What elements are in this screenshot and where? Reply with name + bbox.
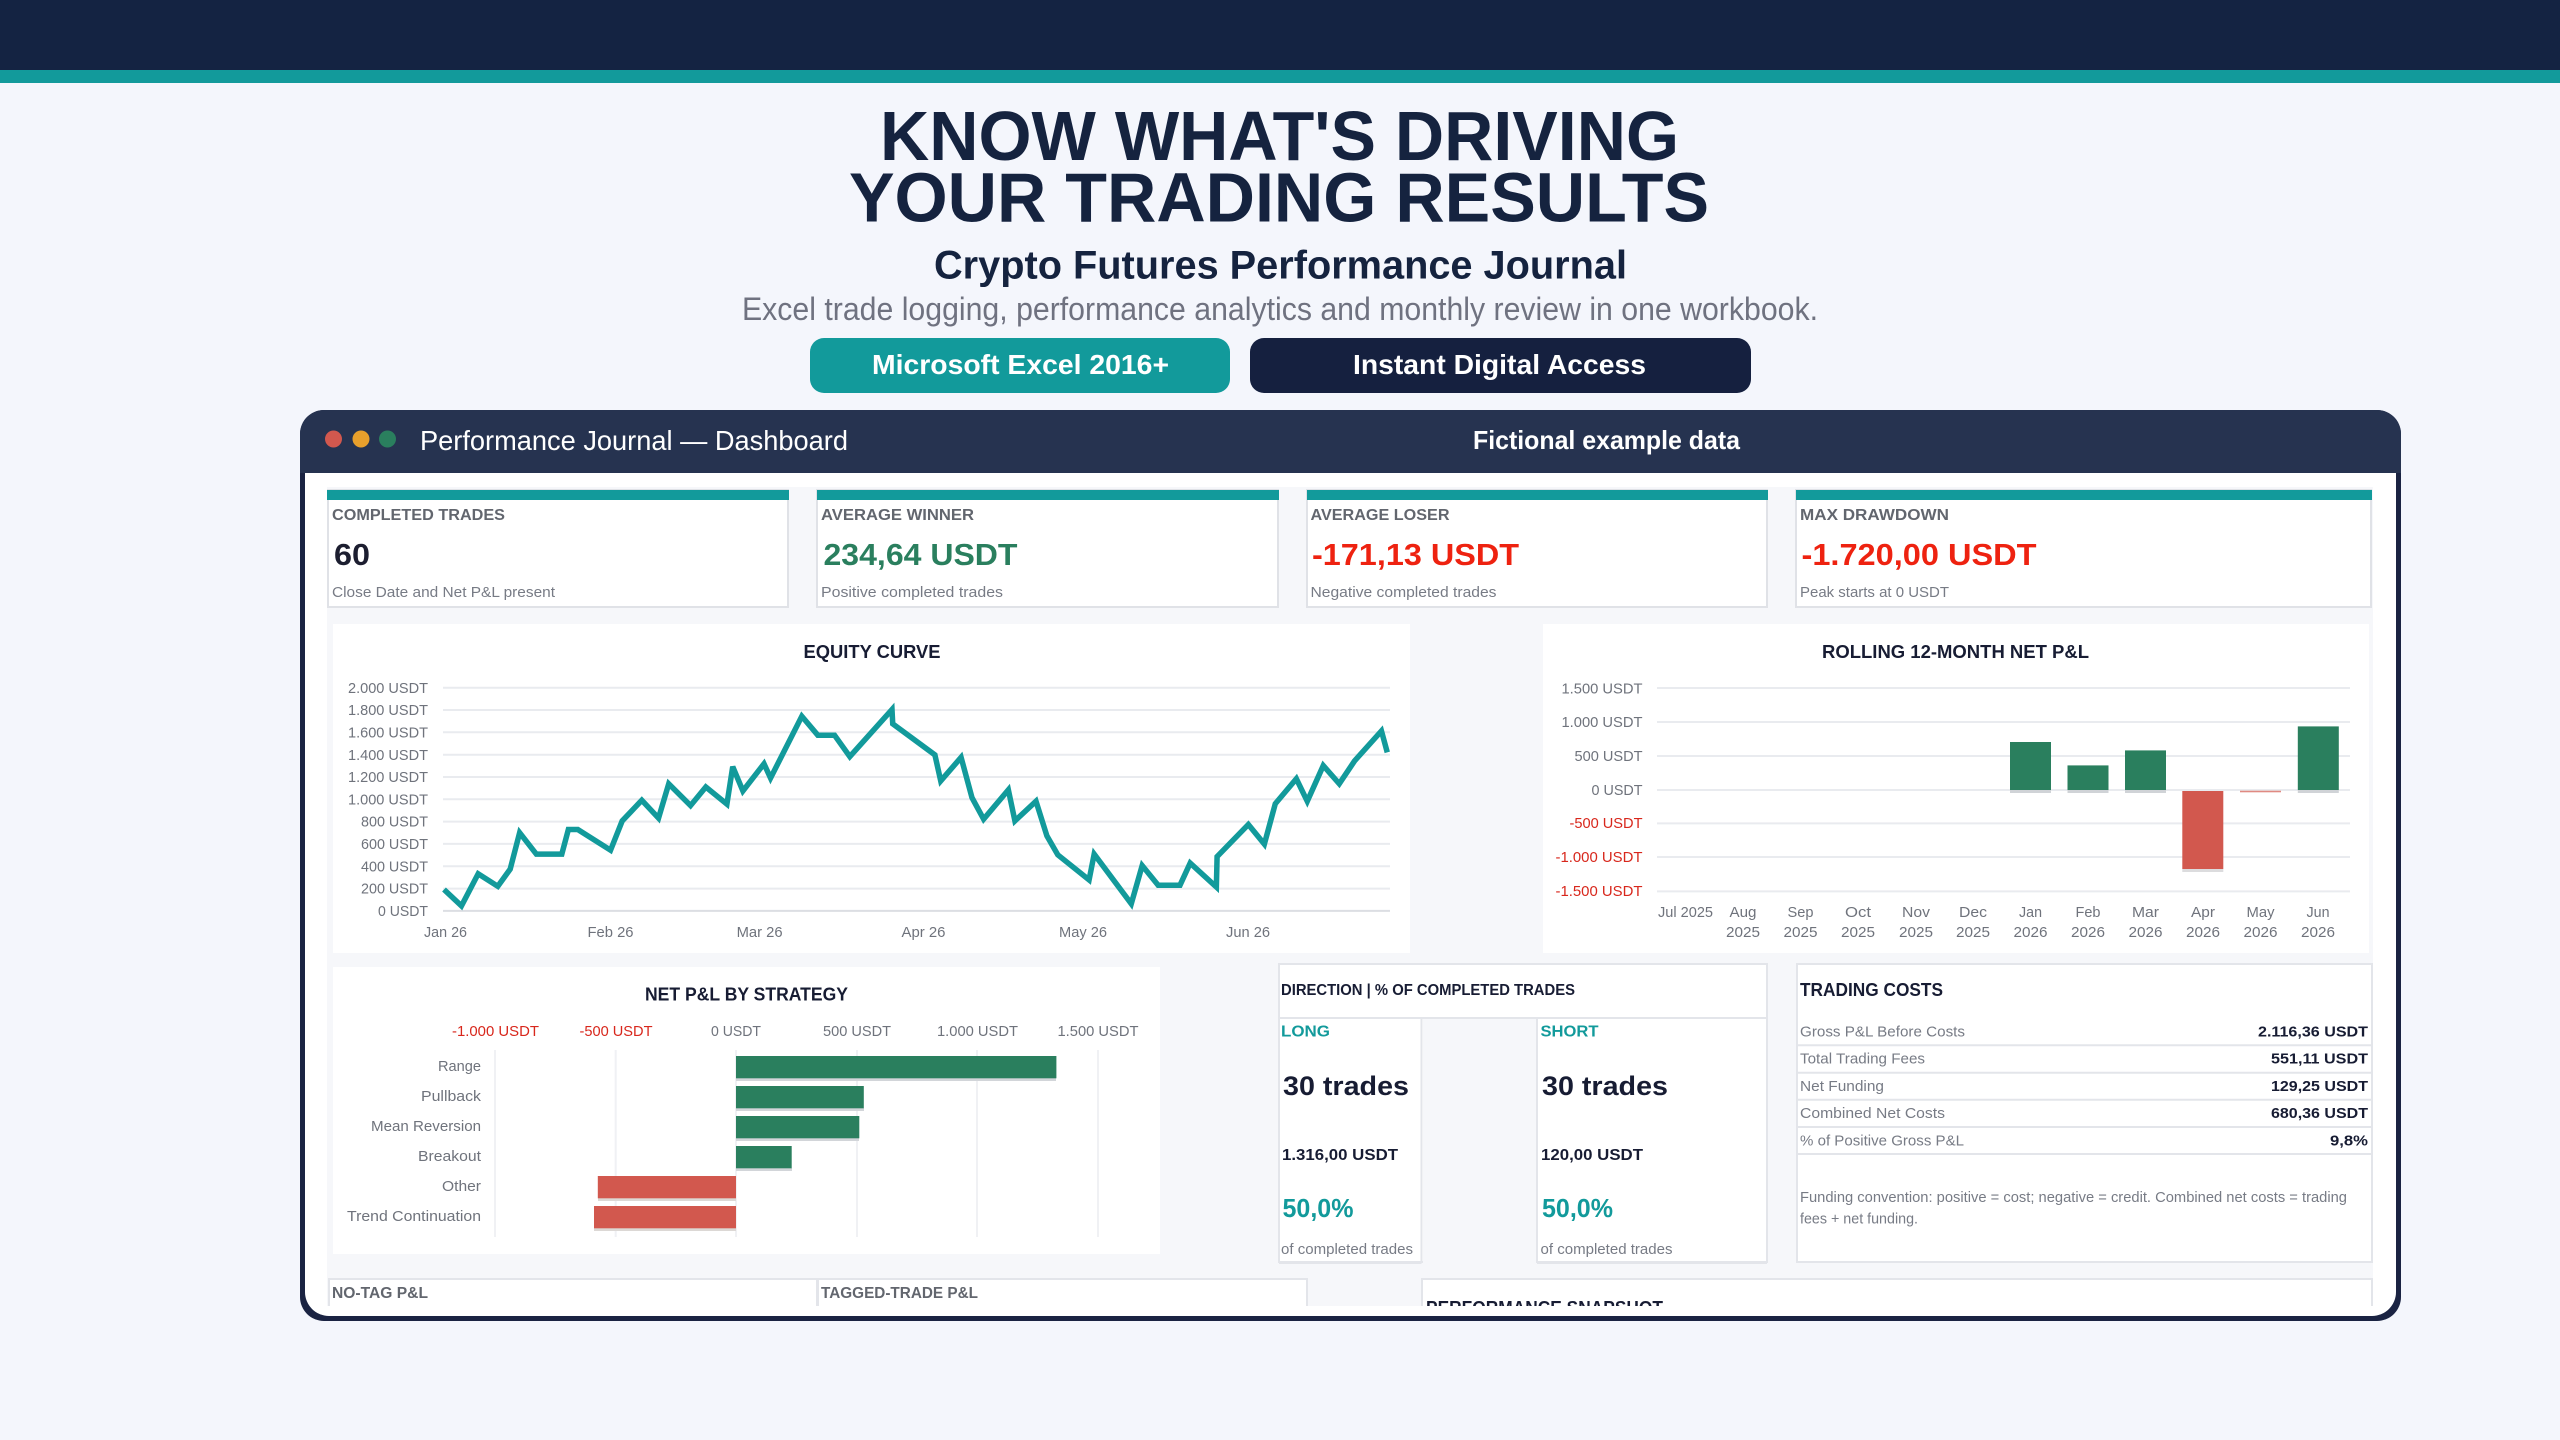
cost rows: [1800, 1024, 2368, 1150]
rolling y axis labels: -1.500 USDT: [1556, 883, 1642, 900]
performance snapshot card: [1421, 1278, 2373, 1306]
window controls: [325, 430, 396, 448]
KPI card: completed trades: COMPLETED TRADES: [332, 507, 505, 524]
rolling y axis labels: 1.500 USDT: [1562, 680, 1642, 697]
rolling x axis labels: 2025: [1726, 924, 1760, 941]
panel: direction split: [1279, 964, 1767, 1264]
cost rows: Total Trading Fees: [1800, 1050, 1925, 1068]
cost rows: 2.116,36 USDT: [2258, 1024, 2368, 1040]
strategy axis labels: 1.000 USDT: [937, 1023, 1018, 1040]
rolling x axis labels: 2025: [1784, 924, 1818, 941]
panel: rolling 12-month net P&L chart: [1543, 624, 2369, 953]
panel: equity curve chart: [333, 624, 1410, 953]
equity x axis labels: Apr 26: [902, 924, 946, 941]
subtitle: Crypto Futures Performance Journal: [934, 244, 1627, 288]
equity y axis labels: 1.800 USDT: [348, 702, 428, 719]
funding note: fees + net funding.: [1800, 1210, 1918, 1228]
rolling y axis labels: 500 USDT: [1574, 748, 1642, 765]
cost rows: 129,25 USDT: [2271, 1078, 2368, 1095]
equity y axis labels: 1.200 USDT: [348, 769, 428, 786]
short column: SHORT: [1540, 1024, 1599, 1040]
funding note: Funding convention: positive = cost; negative = credit. Combined net costs = trading: [1800, 1189, 2347, 1206]
equity y axis labels: 1.400 USDT: [348, 747, 428, 764]
rolling x axis labels: Feb: [2076, 904, 2100, 921]
rolling x axis labels: Nov: [1902, 904, 1931, 921]
equity x axis labels: [424, 924, 1270, 941]
title: KNOW WHAT'S DRIVING: [880, 97, 1679, 175]
short column: 50,0%: [1542, 1193, 1613, 1223]
strategy bars: [594, 1056, 1056, 1231]
rolling x axis labels: Aug: [1730, 904, 1756, 921]
cost rows: Net Funding: [1800, 1078, 1884, 1095]
strategy category labels: [347, 1058, 482, 1225]
panel: trading costs: [1797, 964, 2372, 1262]
KPI card: average winner: [817, 490, 1279, 607]
short column: 120,00 USDT: [1541, 1147, 1643, 1164]
tagged-trade P&L card: [818, 1278, 1308, 1306]
equity y axis labels: 2.000 USDT: [348, 680, 428, 697]
long column: of completed trades: [1281, 1241, 1413, 1258]
rolling x axis labels: 2025: [1841, 924, 1875, 941]
KPI card: average loser: AVERAGE LOSER: [1310, 507, 1450, 524]
rolling y axis labels: -1.000 USDT: [1556, 849, 1642, 866]
long column: 30 trades: [1283, 1071, 1409, 1101]
strategy axis labels: [452, 1023, 1138, 1040]
strategy axis labels: -1.000 USDT: [452, 1023, 539, 1040]
rolling chart title: ROLLING 12-MONTH NET P&L: [1822, 642, 2089, 662]
badge: Instant Digital Access: Instant Digital Access: [1353, 349, 1646, 380]
rolling y axis labels: 1.000 USDT: [1562, 714, 1642, 731]
equity y axis labels: 1.000 USDT: [348, 791, 428, 808]
equity x axis labels: Jun 26: [1226, 924, 1270, 941]
equity x axis labels: May 26: [1059, 924, 1107, 941]
KPI card: average loser: Negative completed trades: [1310, 584, 1496, 601]
rolling x axis labels: 2026: [2071, 924, 2105, 941]
title: YOUR TRADING RESULTS: [849, 158, 1709, 236]
rolling x axis labels: Apr: [2191, 904, 2215, 921]
KPI card: max drawdown: [1796, 490, 2372, 607]
rolling y axis labels: [1556, 680, 1642, 900]
KPI card: average winner: 234,64 USDT: [824, 537, 1018, 572]
long column: [1281, 1024, 1413, 1258]
title: [849, 97, 1709, 236]
fictional data note: Fictional example data: [1473, 425, 1741, 455]
trading costs title: TRADING COSTS: [1800, 980, 1943, 1000]
dashboard window: [300, 410, 2401, 1339]
long column: LONG: [1281, 1024, 1330, 1040]
equity x axis labels: Mar 26: [737, 924, 783, 941]
cost rows: 551,11 USDT: [2271, 1050, 2368, 1068]
rolling x axis labels: 2026: [2244, 924, 2278, 941]
equity y axis labels: 1.600 USDT: [348, 724, 428, 741]
performance snapshot card: PERFORMANCE SNAPSHOT: [1426, 1298, 1663, 1318]
KPI card: max drawdown: Peak starts at 0 USDT: [1800, 584, 1949, 601]
short column: of completed trades: [1540, 1241, 1672, 1258]
cost rows: Combined Net Costs: [1800, 1105, 1945, 1122]
equity y axis labels: 0 USDT: [378, 903, 428, 920]
strategy axis labels: -500 USDT: [580, 1023, 652, 1040]
no-tag P&L card: NO-TAG P&L: [332, 1285, 428, 1302]
KPI card: completed trades: Close Date and Net P&L present: [332, 584, 556, 601]
rolling y axis labels: -500 USDT: [1570, 815, 1642, 832]
tagged-trade P&L card: TAGGED-TRADE P&L: [821, 1285, 978, 1302]
short column: [1540, 1024, 1672, 1258]
tagline: Excel trade logging, performance analytics and monthly review in one workbook.: [742, 291, 1818, 327]
KPI card: average winner: AVERAGE WINNER: [821, 507, 974, 524]
KPI card: completed trades: [327, 490, 789, 607]
rolling x axis labels: May: [2246, 904, 2275, 921]
badge: Microsoft Excel: [810, 338, 1230, 393]
rolling bars: [2010, 726, 2339, 872]
rolling x axis labels: Jan: [2019, 904, 2042, 921]
rolling x axis labels: 2026: [2014, 924, 2048, 941]
strategy category labels: Range: [438, 1058, 481, 1075]
badge: Microsoft Excel: Microsoft Excel 2016+: [872, 349, 1169, 380]
panel: net P&L by strategy chart: [333, 967, 1160, 1254]
rolling x axis labels: Sep: [1788, 904, 1814, 921]
strategy chart title: NET P&L BY STRATEGY: [645, 984, 848, 1004]
strategy category labels: Other: [442, 1178, 481, 1195]
equity line: [444, 709, 1387, 906]
no-tag P&L card: [328, 1278, 817, 1306]
cost rows: 680,36 USDT: [2271, 1105, 2368, 1122]
equity y axis labels: [348, 680, 428, 920]
equity y axis labels: 600 USDT: [361, 836, 428, 853]
rolling x axis labels: Dec: [1959, 904, 1988, 921]
equity y axis labels: 200 USDT: [361, 881, 428, 898]
KPI card: max drawdown: -1.720,00 USDT: [1802, 537, 2037, 572]
rolling x axis labels: Jul 2025: [1658, 904, 1713, 921]
strategy category labels: Mean Reversion: [371, 1118, 481, 1135]
rolling x axis labels: Oct: [1845, 904, 1872, 921]
strategy axis labels: 500 USDT: [823, 1023, 891, 1040]
KPI card: average loser: -171,13 USDT: [1312, 537, 1519, 572]
equity y axis labels: 800 USDT: [361, 814, 428, 831]
KPI card: max drawdown: MAX DRAWDOWN: [1800, 507, 1949, 524]
KPI card: average loser: [1307, 490, 1768, 607]
equity x axis labels: Feb 26: [588, 924, 634, 941]
equity y axis labels: 400 USDT: [361, 858, 428, 875]
rolling x axis labels: Jun: [2306, 904, 2330, 921]
rolling x axis labels: 2025: [1956, 924, 1990, 941]
rolling x axis labels: 2026: [2128, 924, 2162, 941]
equity chart title: EQUITY CURVE: [804, 642, 940, 662]
rolling x axis labels: 2025: [1899, 924, 1933, 941]
cost rows: Gross P&L Before Costs: [1800, 1024, 1965, 1040]
KPI card: completed trades: 60: [334, 537, 370, 572]
funding note: [1800, 1189, 2347, 1228]
badge: Instant Digital Access: [1250, 338, 1751, 393]
strategy axis labels: 1.500 USDT: [1058, 1023, 1138, 1040]
strategy category labels: Breakout: [418, 1148, 482, 1165]
long column: 50,0%: [1282, 1193, 1354, 1223]
strategy category labels: Pullback: [421, 1088, 482, 1105]
strategy axis labels: 0 USDT: [711, 1023, 761, 1040]
panel: cropped bottom row: [328, 1278, 2373, 1306]
cost rows: 9,8%: [2330, 1132, 2368, 1150]
rolling x axis labels: Mar: [2132, 904, 2159, 921]
direction title: DIRECTION | % OF COMPLETED TRADES: [1281, 982, 1575, 999]
rolling x axis labels: [1658, 904, 2335, 941]
cost rows: % of Positive Gross P&L: [1800, 1132, 1964, 1150]
rolling y axis labels: 0 USDT: [1592, 782, 1642, 799]
rolling x axis labels: 2026: [2186, 924, 2220, 941]
strategy category labels: Trend Continuation: [347, 1208, 481, 1225]
long column: 1.316,00 USDT: [1282, 1147, 1398, 1164]
window title: Performance Journal — Dashboard: [420, 425, 848, 456]
short column: 30 trades: [1542, 1071, 1668, 1101]
rolling x axis labels: 2026: [2301, 924, 2335, 941]
top banner: [0, 0, 2560, 83]
equity x axis labels: Jan 26: [424, 924, 467, 941]
KPI card: average winner: Positive completed trades: [821, 584, 1003, 601]
